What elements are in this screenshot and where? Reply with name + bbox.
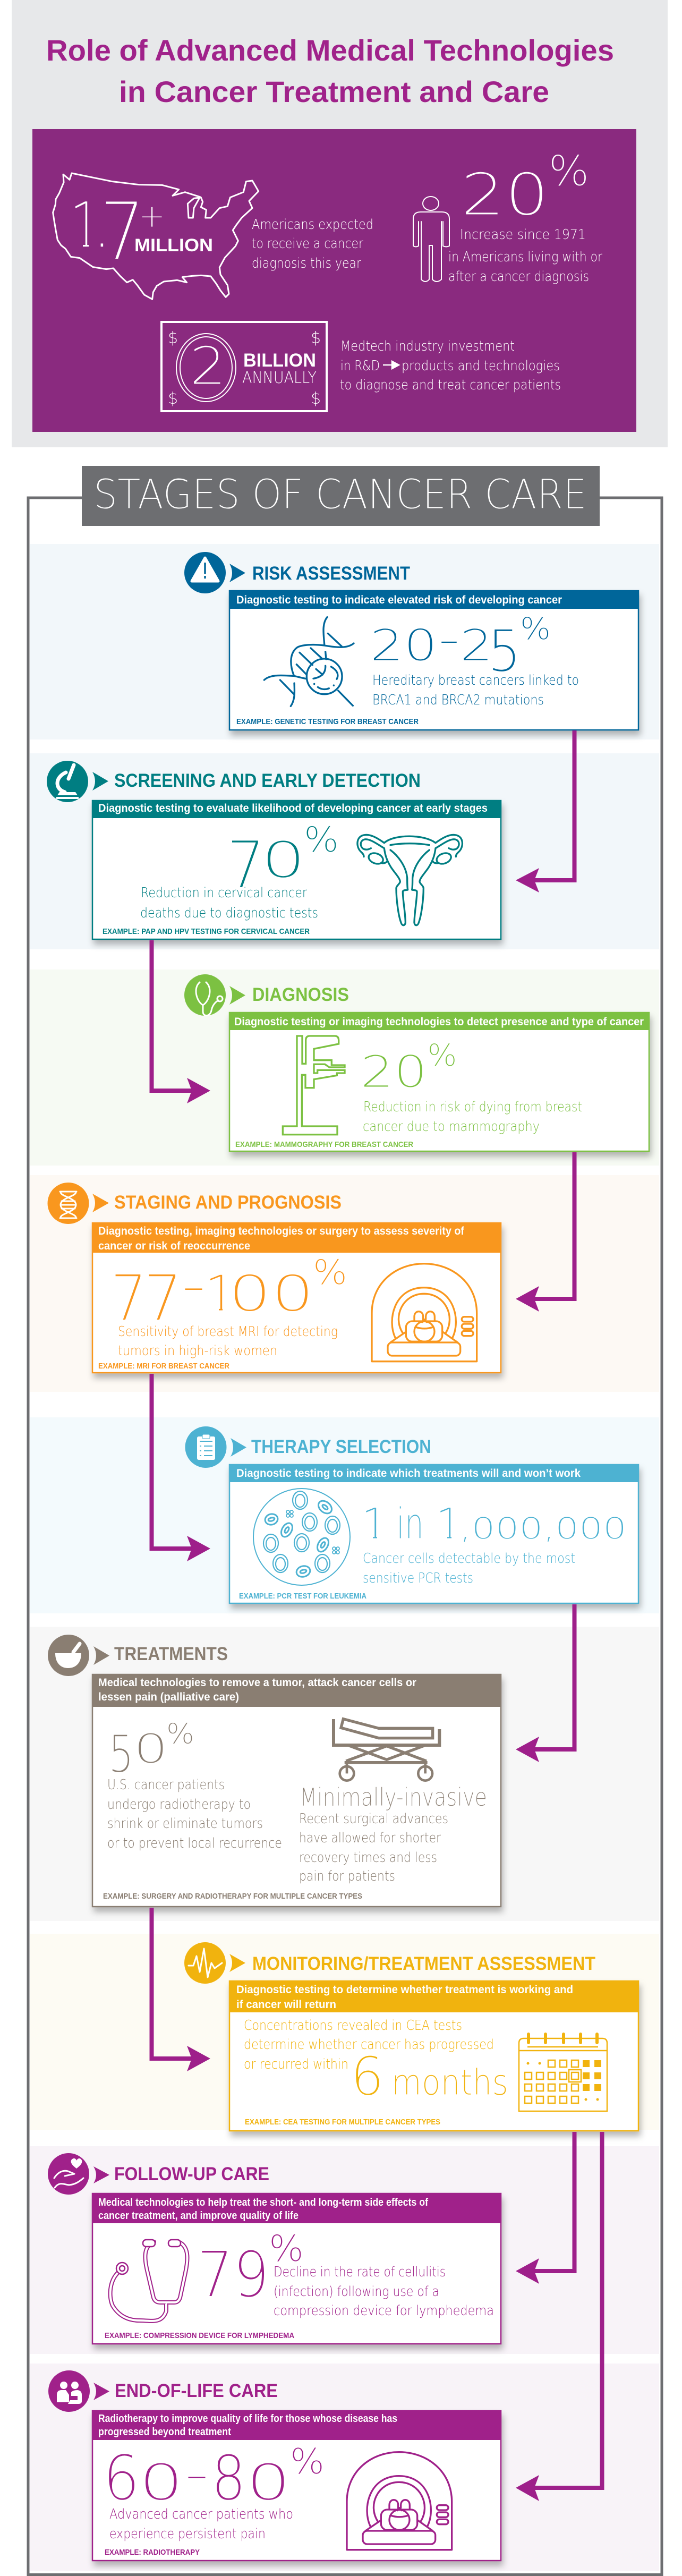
example: EXAMPLE: PAP AND HPV TESTING FOR CERVICAL CANCER bbox=[103, 927, 310, 936]
description: Reduction in risk of dying from breast bbox=[363, 1099, 582, 1115]
card: Diagnostic testing or imaging technologies to detect presence and type of cancer bbox=[234, 1016, 644, 1028]
icon: dollar bill with 2 billion annually: ANNUALLY bbox=[242, 369, 317, 387]
description: radiotherapy: shrink or eliminate tumors bbox=[107, 1816, 263, 1832]
card: Medical technologies to help treat the short- and long-term side effects of bbox=[98, 2197, 428, 2208]
description bbox=[274, 2264, 494, 2319]
stat: 2 bbox=[460, 621, 493, 671]
icon: blood cells in a dish bbox=[253, 1489, 350, 1585]
description: surgery: have allowed for shorter bbox=[299, 1830, 441, 1846]
stat: minimally-invasive: Minimally-invasive bbox=[300, 1783, 487, 1812]
stat: 8 bbox=[211, 2443, 246, 2514]
example: EXAMPLE: GENETIC TESTING FOR BREAST CANCER bbox=[236, 717, 419, 726]
example: EXAMPLE: SURGERY AND RADIOTHERAPY FOR MULTIPLE CANCER TYPES bbox=[103, 1892, 362, 1901]
example: EXAMPLE: COMPRESSION DEVICE FOR LYMPHEDEMA bbox=[105, 2331, 294, 2340]
arrow: monitoring to end-of-life care bbox=[516, 2132, 602, 2501]
example: EXAMPLE: RADIOTHERAPY bbox=[105, 2548, 200, 2557]
text: Medtech investment: products and technologies bbox=[402, 358, 560, 374]
icon: mortar and pestle bbox=[48, 1635, 89, 1676]
heading: FOLLOW-UP CARE bbox=[114, 2164, 269, 2184]
text: Americans expected bbox=[252, 217, 373, 271]
description bbox=[109, 2506, 293, 2542]
stat: 7 bbox=[143, 1262, 183, 1336]
icon: dollar bill with 2 billion annually bbox=[161, 322, 327, 411]
stat: - bbox=[438, 615, 460, 665]
description: compression device for lymphedema bbox=[274, 2303, 494, 2319]
stat: 1.7+ million bbox=[70, 186, 213, 278]
card bbox=[229, 1980, 639, 2131]
arrow: treatments to monitoring bbox=[152, 1908, 210, 2071]
stat: 00 bbox=[228, 1265, 314, 1322]
description bbox=[363, 1099, 582, 1135]
text: Americans expected: to receive a cancer bbox=[252, 236, 363, 252]
icon: stethoscope bbox=[184, 974, 226, 1016]
stat: 5 bbox=[488, 618, 521, 685]
stat: 20 bbox=[370, 621, 438, 671]
icon: person outline bbox=[413, 197, 449, 282]
stat: - bbox=[182, 1257, 206, 1314]
icon: map of the United States bbox=[53, 173, 259, 299]
example: EXAMPLE: CEA TESTING FOR MULTIPLE CANCER TYPES bbox=[245, 2118, 440, 2127]
stat: 7 bbox=[227, 828, 265, 903]
icon: MRI scanner bbox=[372, 1264, 477, 1362]
stat: 0 bbox=[139, 2454, 184, 2511]
panel: monitoring and treatment assessment bbox=[30, 1934, 659, 2131]
stat: 0 bbox=[246, 2454, 291, 2511]
title bbox=[46, 33, 614, 108]
icon: dollar bill with 2 billion annually: $ bbox=[311, 389, 321, 408]
icon: calendar bbox=[519, 2034, 607, 2111]
stat: 1.7+ million: 1 bbox=[70, 189, 101, 262]
card bbox=[92, 1674, 501, 1907]
stat: 50 percent: 5 bbox=[108, 1724, 134, 1784]
icon: radiotherapy machine bbox=[347, 2452, 452, 2550]
title: in Cancer Treatment and Care bbox=[119, 75, 549, 108]
description: or recurred within bbox=[244, 2056, 348, 2072]
stat: % bbox=[313, 1253, 347, 1293]
description: radiotherapy: U.S. cancer patients bbox=[107, 1777, 225, 1793]
icon: dollar bill with 2 billion annually: BILLION bbox=[243, 350, 316, 371]
description bbox=[363, 1551, 575, 1586]
card bbox=[229, 1012, 650, 1151]
heading: RISK ASSESSMENT bbox=[252, 563, 410, 584]
card: cancer or risk of reoccurrence bbox=[98, 1240, 250, 1252]
chevron bbox=[229, 986, 245, 1005]
icon: dollar bill with 2 billion annually: $ bbox=[168, 389, 178, 408]
arrow: screening to diagnosis bbox=[152, 940, 210, 1103]
heading: TREATMENTS bbox=[114, 1644, 228, 1664]
icon: DNA helix bbox=[48, 1183, 89, 1224]
card bbox=[229, 1464, 639, 1603]
stat: 79 bbox=[197, 2239, 269, 2312]
card: Diagnostic testing to evaluate likelihood of developing cancer at early stages bbox=[98, 802, 488, 814]
example: EXAMPLE: MAMMOGRAPHY FOR BREAST CANCER bbox=[235, 1140, 413, 1149]
icon: two people bbox=[48, 2370, 90, 2412]
card bbox=[92, 800, 501, 939]
icon: dollar bill with 2 billion annually: $ bbox=[311, 329, 321, 347]
description: deaths due to diagnostic tests bbox=[140, 905, 318, 921]
heading: MONITORING/TREATMENT ASSESSMENT bbox=[252, 1953, 595, 1974]
description: Advanced cancer patients who bbox=[109, 2506, 293, 2522]
description: cancer due to mammography bbox=[363, 1119, 540, 1135]
icon: microscope bbox=[47, 761, 88, 802]
description: Hereditary breast cancers linked to bbox=[372, 673, 579, 688]
stat: 1 bbox=[361, 1499, 388, 1549]
arrow: therapy selection to treatments bbox=[516, 1604, 575, 1762]
card: Diagnostic testing to determine whether treatment is working and bbox=[236, 1984, 573, 1996]
text: increase since 1971 bbox=[448, 227, 602, 285]
text: increase since 1971: in Americans living with or bbox=[448, 249, 602, 265]
panel: screening and early detection bbox=[30, 753, 659, 949]
stat: 1 bbox=[436, 1499, 463, 1549]
stat: 1.7+ million: MILLION bbox=[134, 235, 213, 256]
stat: % bbox=[269, 2228, 304, 2270]
icon: surgical bed bbox=[334, 1719, 439, 1781]
arrow: risk assessment to screening bbox=[516, 730, 575, 892]
icon: DNA under magnifying glass bbox=[264, 617, 354, 706]
heading: SCREENING AND EARLY DETECTION bbox=[114, 770, 421, 791]
chevron bbox=[92, 1194, 109, 1212]
description bbox=[118, 1324, 338, 1359]
title: Role of Advanced Medical Technologies bbox=[46, 33, 614, 67]
card: Radiotherapy to improve quality of life for those whose disease has bbox=[98, 2413, 397, 2425]
stat: 6 months: 6 bbox=[351, 2045, 384, 2107]
text: Medtech investment: to diagnose and treat cancer patients bbox=[340, 377, 561, 393]
description: radiotherapy: undergo radiotherapy to bbox=[107, 1797, 251, 1813]
panel: end-of-life care bbox=[30, 2364, 659, 2571]
icon: clipboard bbox=[185, 1426, 226, 1468]
description: (infection) following use of a bbox=[274, 2284, 439, 2300]
stat: 0 bbox=[261, 831, 306, 889]
stat: % bbox=[520, 611, 551, 647]
icon: hand holding heart bbox=[48, 2153, 89, 2195]
stat: 1 bbox=[204, 1265, 236, 1322]
stat: 7 bbox=[110, 1262, 147, 1336]
stat: % bbox=[290, 2441, 325, 2482]
chevron bbox=[231, 1438, 246, 1457]
stat: 50 percent: 0 bbox=[134, 1725, 168, 1772]
description: determine whether cancer has progressed bbox=[244, 2037, 494, 2053]
description: sensitive PCR tests bbox=[363, 1570, 473, 1586]
chevron bbox=[229, 1954, 245, 1972]
stat: 1.7+ million: + bbox=[139, 198, 165, 235]
icon: uterus bbox=[357, 835, 462, 925]
description: experience persistent pain bbox=[109, 2526, 266, 2542]
frame around stages bbox=[28, 498, 662, 2574]
stat bbox=[110, 1253, 347, 1336]
heading: THERAPY SELECTION bbox=[251, 1436, 431, 1457]
card: if cancer will return bbox=[236, 1999, 336, 2011]
stages heading banner: STAGES OF CANCER CARE bbox=[93, 471, 587, 518]
stat: 20 bbox=[360, 1047, 427, 1098]
panel: follow-up care bbox=[30, 2146, 659, 2354]
stat: - bbox=[185, 2445, 209, 2503]
card: Diagnostic testing to indicate which treatments will and won’t work bbox=[236, 1467, 581, 1480]
text: Americans expected: Americans expected bbox=[252, 217, 373, 233]
stat: 6 bbox=[103, 2443, 140, 2514]
card: cancer treatment, and improve quality of life bbox=[98, 2210, 299, 2222]
stat: 1.7+ million: . bbox=[92, 189, 112, 262]
description: Reduction in cervical cancer bbox=[141, 885, 307, 901]
card bbox=[92, 2410, 501, 2561]
description bbox=[372, 673, 579, 708]
heading: STAGING AND PROGNOSIS bbox=[114, 1192, 342, 1213]
stat: 50 percent: % bbox=[166, 1718, 194, 1750]
stat: in bbox=[396, 1499, 424, 1549]
icon: warning bbox=[184, 552, 226, 593]
card bbox=[92, 1222, 501, 1373]
heading: END-OF-LIFE CARE bbox=[115, 2381, 278, 2401]
panel: risk assessment bbox=[30, 544, 659, 739]
description: surgery: pain for patients bbox=[299, 1868, 395, 1884]
arrow: monitoring to follow-up care bbox=[516, 2132, 575, 2284]
icon: dollar bill with 2 billion annually: $ bbox=[168, 329, 178, 347]
icon: stethoscope bbox=[110, 2240, 187, 2321]
chevron bbox=[229, 564, 245, 582]
text: Americans expected: diagnosis this year bbox=[252, 256, 361, 271]
description: Cancer cells detectable by the most bbox=[363, 1551, 575, 1567]
description: radiotherapy: or to prevent local recurrence bbox=[107, 1835, 282, 1851]
heading: DIAGNOSIS bbox=[252, 984, 349, 1005]
chevron bbox=[92, 772, 108, 790]
description: Sensitivity of breast MRI for detecting bbox=[118, 1324, 338, 1340]
panel: therapy selection bbox=[30, 1417, 659, 1613]
text: increase since 1971: Increase since 1971 bbox=[460, 227, 586, 243]
description bbox=[140, 885, 318, 921]
icon: pulse bbox=[184, 1942, 226, 1984]
header panel bbox=[12, 0, 668, 447]
description: BRCA1 and BRCA2 mutations bbox=[372, 692, 544, 708]
card: Medical technologies to remove a tumor, attack cancer cells or bbox=[98, 1677, 416, 1689]
text: Medtech investment: Medtech industry investment bbox=[340, 338, 515, 354]
card: Diagnostic testing to indicate elevated risk of developing cancer bbox=[236, 594, 562, 606]
chevron bbox=[93, 1646, 109, 1665]
text: Medtech investment bbox=[340, 338, 561, 393]
stat: ,000,000 bbox=[459, 1511, 627, 1545]
stat bbox=[361, 1499, 627, 1549]
example: EXAMPLE: PCR TEST FOR LEUKEMIA bbox=[239, 1592, 366, 1601]
stat: % bbox=[427, 1038, 457, 1073]
icon: mammography machine bbox=[283, 1036, 345, 1135]
card bbox=[229, 590, 639, 730]
description: radiotherapy bbox=[107, 1777, 282, 1851]
stat: % bbox=[304, 820, 339, 860]
panel: diagnosis bbox=[30, 970, 659, 1166]
example: EXAMPLE: MRI FOR BREAST CANCER bbox=[98, 1362, 229, 1371]
stat: 1.7+ million: 7 bbox=[100, 186, 145, 278]
description bbox=[244, 2018, 494, 2072]
card: lessen pain (palliative care) bbox=[98, 1691, 239, 1703]
panel: key statistics bbox=[32, 129, 636, 432]
arrow: diagnosis to staging bbox=[516, 1152, 575, 1312]
text: increase since 1971: after a cancer diagnosis bbox=[448, 269, 589, 285]
card: progressed beyond treatment bbox=[98, 2426, 231, 2438]
description: surgery: Recent surgical advances bbox=[299, 1811, 448, 1827]
text: Medtech investment: in R&D bbox=[340, 358, 380, 374]
stat: 6 months: months bbox=[391, 2062, 508, 2103]
description: surgery: recovery times and less bbox=[299, 1850, 437, 1866]
panel: staging and prognosis bbox=[30, 1175, 659, 1392]
chevron bbox=[93, 2383, 109, 2400]
card: Diagnostic testing, imaging technologies or surgery to assess severity of bbox=[98, 1225, 465, 1237]
card bbox=[92, 2193, 501, 2344]
description: Concentrations revealed in CEA tests bbox=[244, 2018, 462, 2034]
description: tumors in high-risk women bbox=[118, 1343, 277, 1359]
stat: 20 percent: 20 bbox=[461, 161, 549, 228]
icon: dollar bill with 2 billion annually: 2 bbox=[190, 336, 226, 397]
arrow: staging to therapy selection bbox=[152, 1374, 210, 1561]
description: surgery bbox=[299, 1811, 448, 1884]
stat: 20 percent: % bbox=[548, 148, 590, 195]
chevron bbox=[93, 2166, 109, 2183]
panel: treatments bbox=[30, 1627, 659, 1921]
description: Decline in the rate of cellulitis bbox=[274, 2264, 446, 2280]
